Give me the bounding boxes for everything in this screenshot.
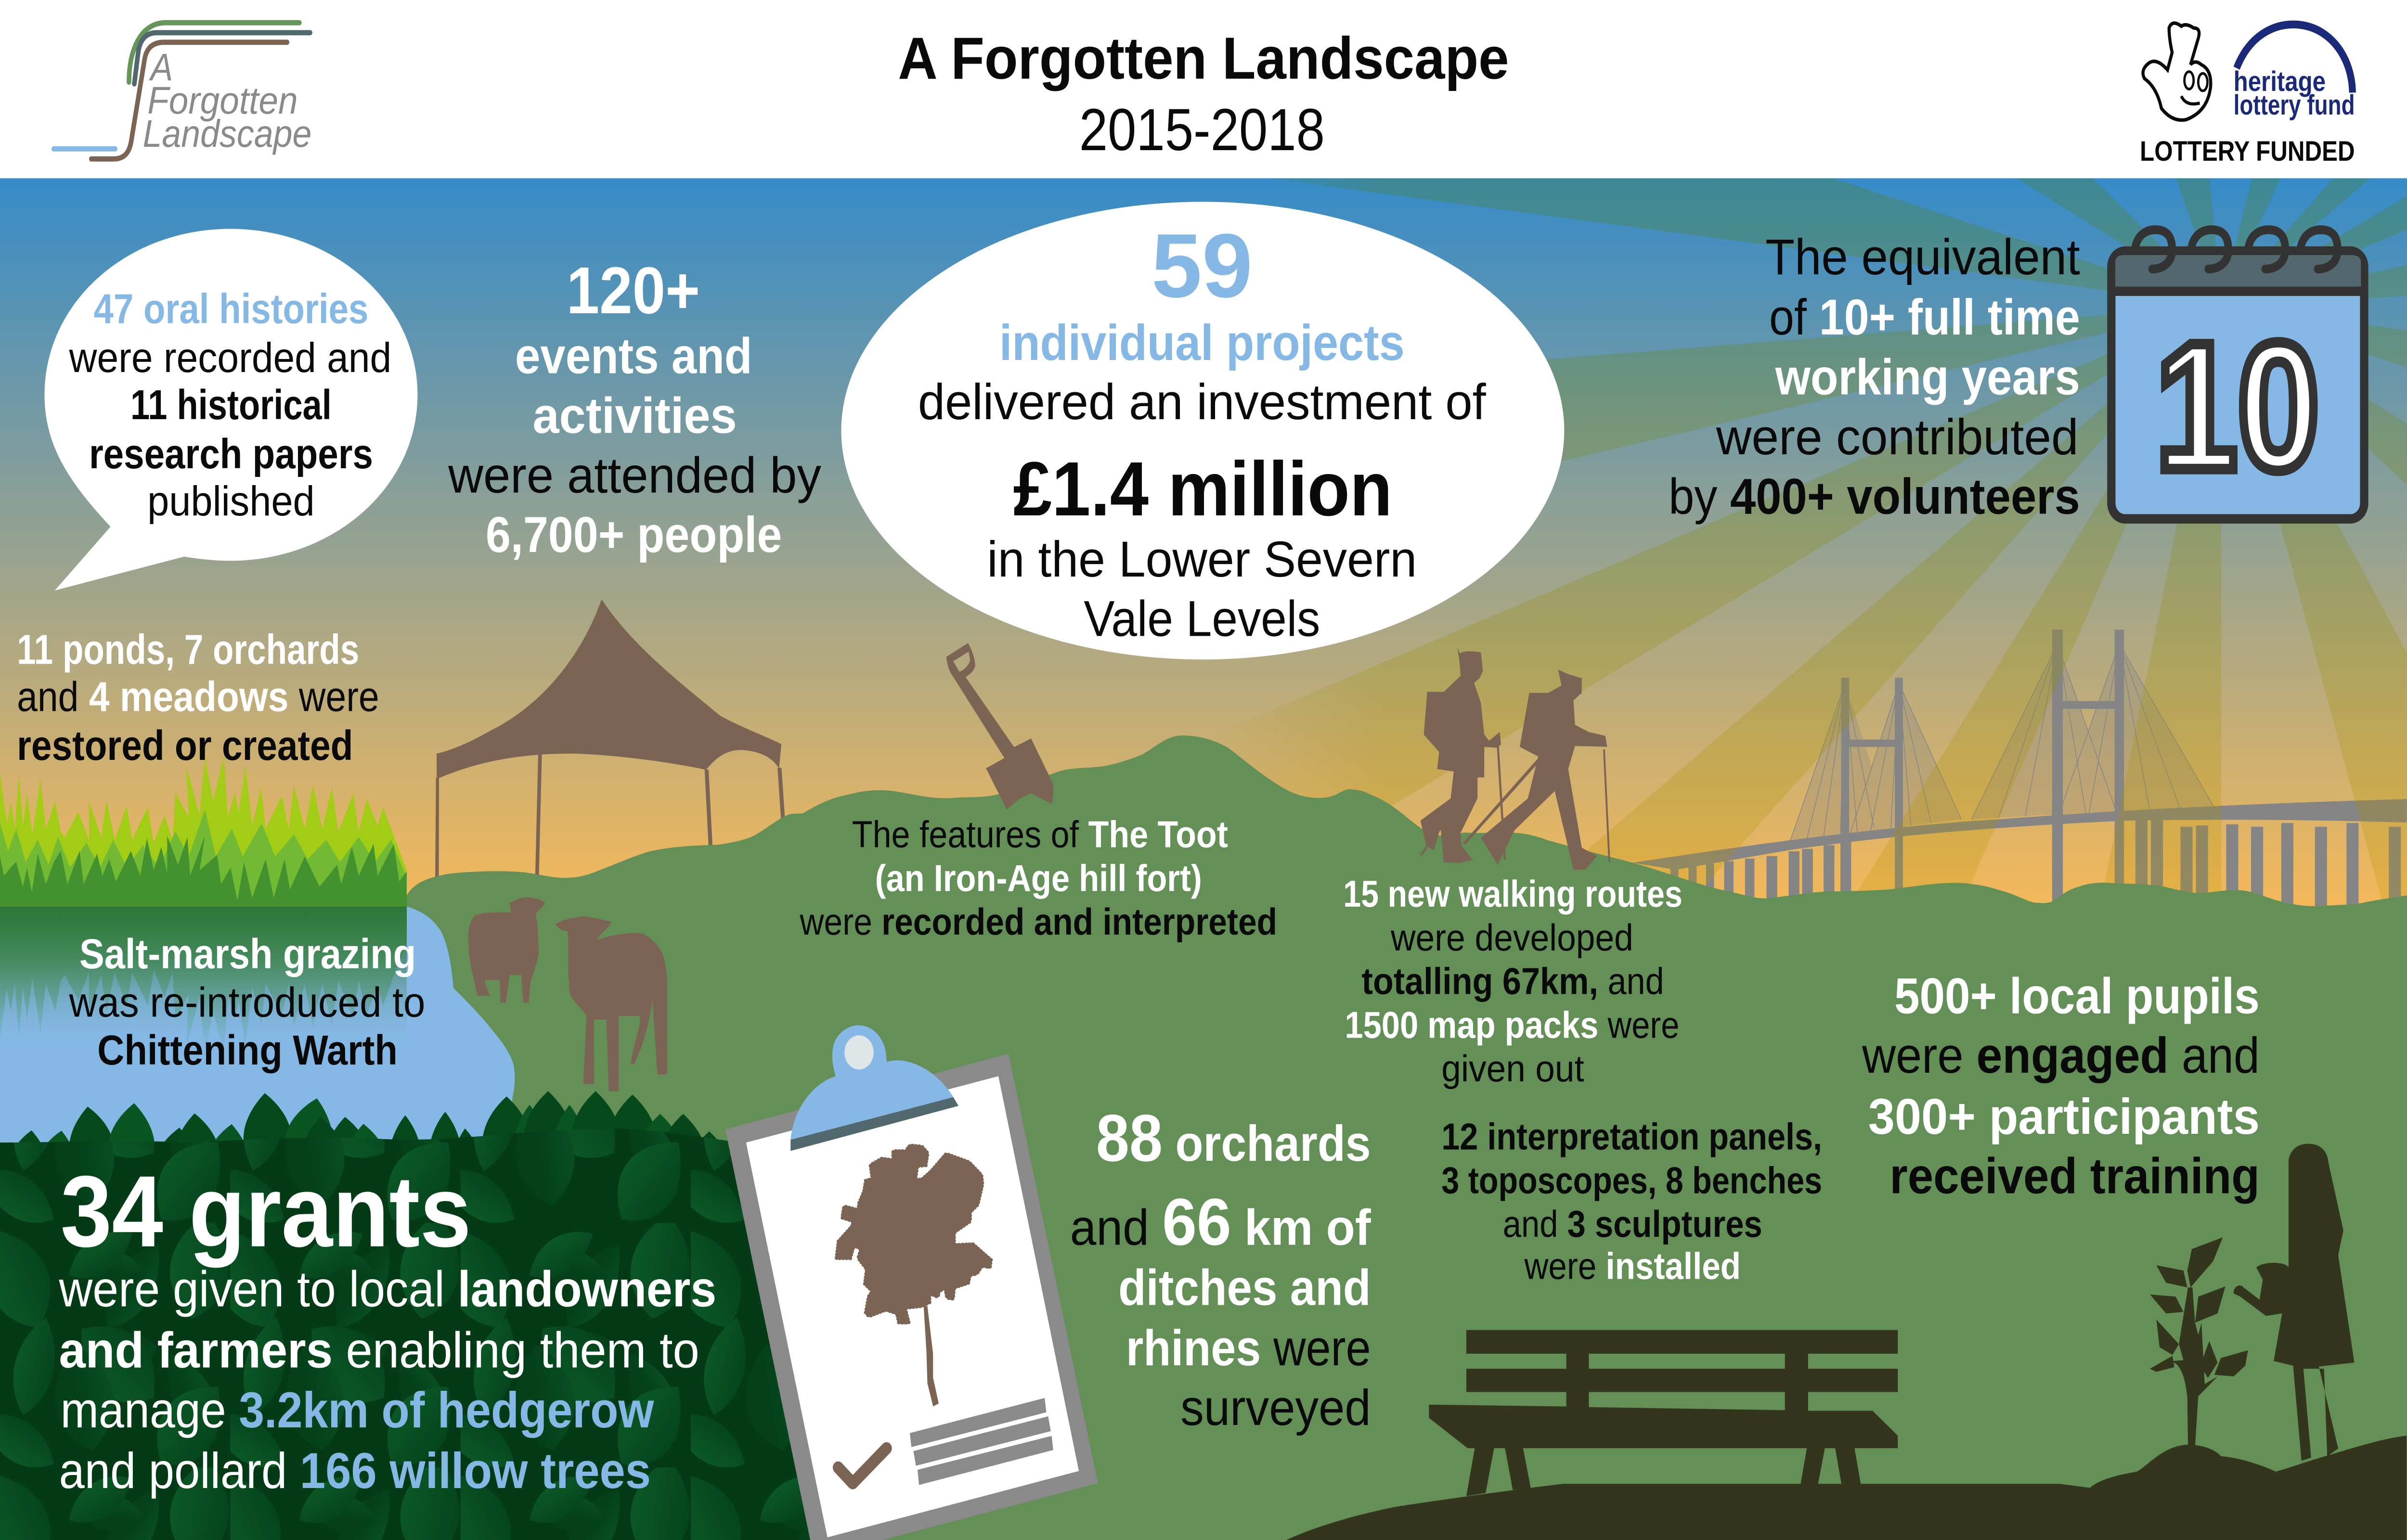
walking routes text bbox=[1343, 873, 1682, 1090]
investment ellipse bbox=[841, 202, 1564, 659]
water bbox=[0, 907, 515, 1206]
walking routes text: 15 new walking routes bbox=[1343, 873, 1682, 915]
title bbox=[898, 25, 1509, 163]
investment text: delivered an investment of bbox=[918, 373, 1486, 430]
grants text: were given to local landowners bbox=[58, 1260, 716, 1317]
grants text: and pollard 166 willow trees bbox=[59, 1442, 651, 1499]
walking routes text: 1500 map packs were bbox=[1345, 1004, 1680, 1046]
The Toot text: The features of The Toot bbox=[852, 814, 1228, 856]
installations text bbox=[1441, 1116, 1822, 1287]
walking routes text: were developed bbox=[1390, 917, 1633, 959]
bubble text: published bbox=[147, 478, 315, 525]
bench and ground bbox=[1286, 1330, 2407, 1540]
volunteers text: working years bbox=[1775, 348, 2080, 405]
logo: A Forgotten Landscape: Landscape bbox=[143, 112, 311, 155]
investment text bbox=[918, 215, 1486, 647]
girl watering a plant bbox=[2150, 1144, 2355, 1461]
pupils text: 500+ local pupils bbox=[1894, 967, 2260, 1024]
events text: were attended by bbox=[448, 447, 821, 503]
ponds text: 11 ponds, 7 orchards bbox=[17, 627, 359, 673]
logo: A Forgotten Landscape: Forgotten bbox=[147, 79, 298, 122]
title: A Forgotten Landscape bbox=[898, 25, 1509, 91]
grants text bbox=[58, 1155, 716, 1499]
pupils text bbox=[1862, 967, 2260, 1204]
title: 2015-2018 bbox=[1079, 97, 1325, 163]
form lines bbox=[910, 1398, 1053, 1485]
volunteers text: of 10+ full time bbox=[1769, 288, 2080, 345]
investment text: 59 bbox=[1152, 215, 1253, 317]
investment text: £1.4 million bbox=[1013, 446, 1392, 532]
grants text: manage 3.2km of hedgerow bbox=[61, 1381, 654, 1438]
events text: activities bbox=[533, 387, 737, 444]
pupils text: received training bbox=[1889, 1147, 2260, 1204]
surveys text: and 66 km of bbox=[1070, 1184, 1372, 1259]
The Toot text bbox=[799, 814, 1277, 943]
bubble text: 47 oral histories bbox=[94, 286, 368, 333]
bubble text: research papers bbox=[89, 431, 373, 477]
salt-marsh text bbox=[68, 931, 425, 1074]
logo: heritage lottery fund: heritage bbox=[2234, 66, 2326, 97]
pupils text: were engaged and bbox=[1862, 1027, 2260, 1083]
shovel bbox=[946, 643, 1053, 809]
logo: heritage lottery fund bbox=[2234, 25, 2355, 121]
installations text: 3 toposcopes, 8 benches bbox=[1441, 1159, 1822, 1201]
volunteers text: The equivalent bbox=[1765, 228, 2080, 285]
bubble text: were recorded and bbox=[69, 335, 391, 381]
sun rays bbox=[1258, 178, 2407, 899]
ponds text bbox=[17, 627, 379, 769]
calendar icon bbox=[2111, 230, 2364, 519]
installations text: and 3 sculptures bbox=[1503, 1203, 1762, 1245]
ponds text: and 4 meadows were bbox=[17, 674, 379, 720]
sky gradient bbox=[0, 178, 2407, 947]
investment text: Vale Levels bbox=[1084, 590, 1320, 647]
clipboard clip bbox=[790, 1026, 958, 1151]
logo: lottery hand bbox=[2143, 23, 2211, 120]
white header band bbox=[0, 0, 2407, 178]
installations text: were installed bbox=[1524, 1245, 1741, 1287]
water reflection bbox=[0, 906, 407, 1055]
tent bbox=[435, 599, 790, 916]
surveys text bbox=[1070, 1101, 1372, 1436]
salt-marsh text: Salt-marsh grazing bbox=[79, 931, 416, 977]
The Toot text: were recorded and interpreted bbox=[799, 901, 1277, 943]
volunteers text bbox=[1669, 228, 2080, 525]
installations text: 12 interpretation panels, bbox=[1441, 1116, 1822, 1158]
bridge bbox=[1632, 629, 2407, 908]
bubble text bbox=[69, 286, 391, 525]
speech bubble bbox=[44, 229, 417, 590]
logo: A Forgotten Landscape bbox=[54, 23, 311, 159]
grass bbox=[0, 757, 407, 906]
grants text: and farmers enabling them to bbox=[59, 1322, 699, 1378]
clipboard bbox=[725, 1026, 1098, 1540]
logo: heritage lottery fund: lottery fund bbox=[2234, 90, 2355, 121]
The Toot text: (an Iron-Age hill fort) bbox=[875, 857, 1202, 899]
check mark bbox=[838, 1448, 887, 1483]
investment text: individual projects bbox=[999, 314, 1405, 371]
hills bbox=[368, 735, 2407, 1540]
events text: 6,700+ people bbox=[486, 506, 782, 563]
salt-marsh text: was re-introduced to bbox=[68, 979, 425, 1026]
logo: A Forgotten Landscape: A bbox=[149, 46, 173, 89]
pupils text: 300+ participants bbox=[1868, 1088, 2260, 1144]
investment text: in the Lower Severn bbox=[987, 530, 1417, 587]
surveys text: ditches and bbox=[1118, 1259, 1371, 1316]
calendar rings bbox=[2135, 230, 2338, 269]
surveys text: rhines were bbox=[1126, 1319, 1371, 1376]
lottery funded label: LOTTERY FUNDED bbox=[2140, 136, 2355, 167]
events text: 120+ bbox=[567, 253, 700, 328]
volunteers text: were contributed bbox=[1716, 408, 2079, 465]
surveys text: 88 orchards bbox=[1096, 1101, 1371, 1175]
surveys text: surveyed bbox=[1180, 1379, 1371, 1436]
sheep bbox=[468, 897, 667, 1091]
events text: events and bbox=[515, 327, 752, 384]
grants text: 34 grants bbox=[61, 1155, 471, 1268]
bubble text: 11 historical bbox=[130, 382, 332, 428]
walking routes text: totalling 67km, and bbox=[1361, 960, 1664, 1002]
calendar icon: 10 bbox=[2155, 305, 2319, 508]
salt-marsh text: Chittening Warth bbox=[97, 1027, 398, 1074]
hikers bbox=[1420, 647, 1610, 870]
volunteers text: by 400+ volunteers bbox=[1669, 468, 2080, 525]
ponds text: restored or created bbox=[17, 723, 353, 769]
tree silhouette bbox=[837, 1146, 991, 1406]
hedge bbox=[0, 1091, 829, 1540]
events text bbox=[448, 253, 821, 563]
walking routes text: given out bbox=[1441, 1048, 1584, 1090]
